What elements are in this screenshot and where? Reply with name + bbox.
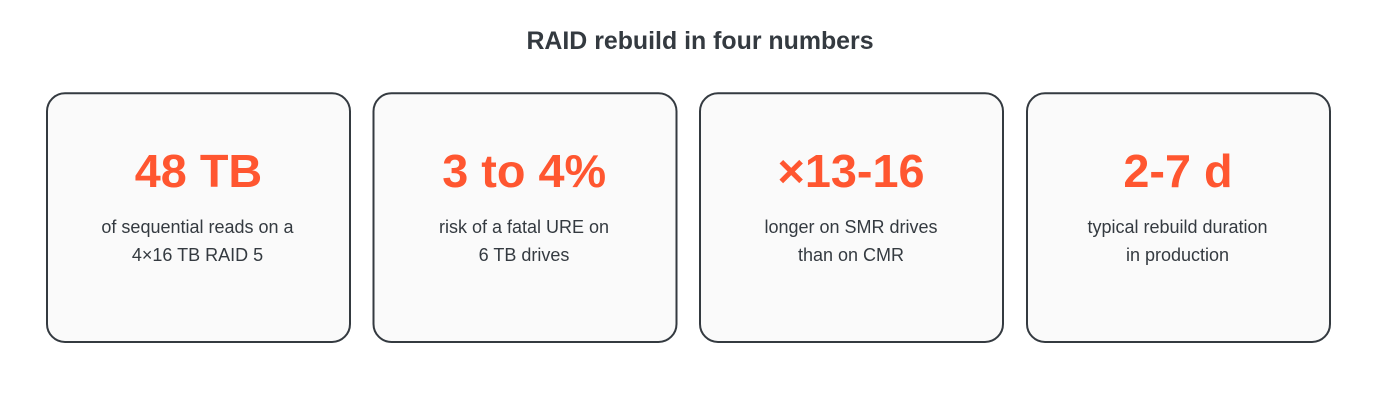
panel: 48 TB: [47, 93, 350, 342]
description: SMR versus CMR: [764, 217, 938, 265]
description: rebuild duration: in production: [1126, 245, 1229, 265]
title: RAID rebuild in four numbers: [526, 27, 874, 55]
description: URE risk: [439, 217, 609, 265]
description: rebuild duration: [1087, 217, 1268, 265]
description: SMR versus CMR: longer on SMR drives: [764, 217, 938, 237]
panel: 2-7 d: [1027, 93, 1330, 342]
stat: 3 to 4%: 3 to 4%: [442, 145, 606, 197]
panel: ×13-16: [700, 93, 1003, 342]
description: URE risk: 6 TB drives: [479, 245, 569, 265]
description: sequential reads: 4×16 TB RAID 5: [132, 245, 263, 265]
description: sequential reads: [101, 217, 295, 265]
description: URE risk: risk of a fatal URE on: [439, 217, 609, 237]
description: SMR versus CMR: than on CMR: [798, 245, 904, 265]
stat: 2-7 d: 2-7 d: [1123, 145, 1233, 197]
stat: ×13-16: ×13-16: [777, 145, 925, 197]
panel: 3 to 4%: [374, 93, 676, 342]
description: rebuild duration: typical rebuild duration: [1087, 217, 1268, 237]
stat: 48 TB: 48 TB: [135, 145, 262, 197]
description: sequential reads: of sequential reads on a: [101, 217, 295, 237]
